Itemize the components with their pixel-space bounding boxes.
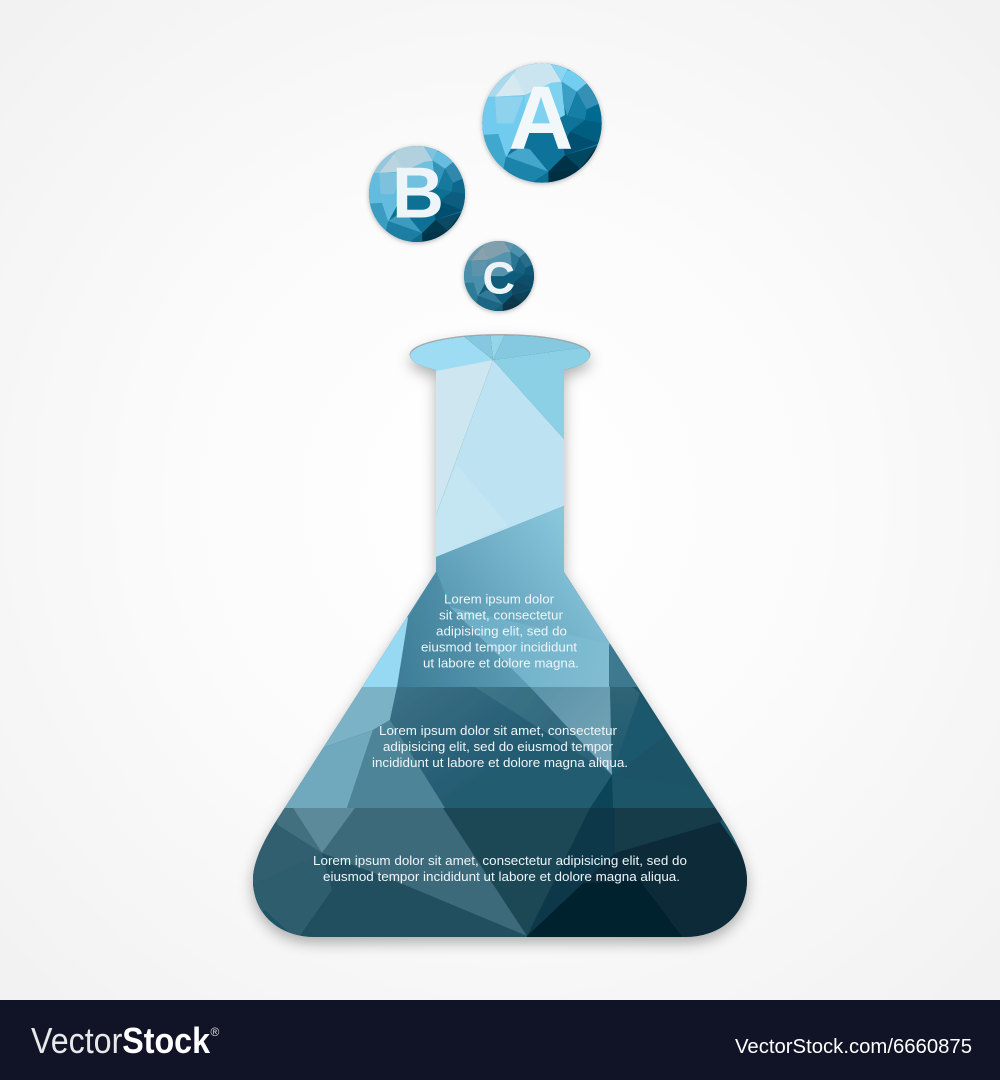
- flask: [240, 330, 760, 940]
- footer image id: VectorStock.com/6660875: [735, 1036, 972, 1058]
- text block: top: sit amet, consectetur: [439, 608, 564, 622]
- bubble A: [480, 60, 607, 187]
- text block: bottom: Lorem ipsum dolor sit amet, consectetur adipisicing elit, sed do: [313, 853, 687, 868]
- text block: bottom: eiusmod tempor incididunt ut labore et dolore magna aliqua.: [323, 869, 680, 884]
- footer logo: VectorStock: [31, 1020, 211, 1061]
- text block: top: adipisicing elit, sed do: [436, 624, 567, 638]
- bubble C: C: [482, 253, 515, 304]
- footer bar: [0, 1000, 1000, 1080]
- text block: middle: Lorem ipsum dolor sit amet, consectetur: [379, 723, 618, 738]
- bubble C: [463, 239, 537, 313]
- text block: middle: incididunt ut labore et dolore magna aliqua.: [372, 755, 628, 770]
- flask rim shadow: [410, 334, 590, 375]
- text block: top: ut labore et dolore magna.: [423, 656, 579, 670]
- bubble A: A: [508, 69, 574, 169]
- registered mark: ®: [210, 1025, 220, 1039]
- bubble B: B: [392, 154, 444, 234]
- text block: top: Lorem ipsum dolor: [444, 592, 555, 606]
- text block: middle: adipisicing elit, sed do eiusmod tempor: [383, 739, 614, 754]
- flask body: [240, 330, 760, 940]
- text block: bottom: [313, 853, 687, 884]
- text block: top: eiusmod tempor incididunt: [421, 640, 577, 654]
- text block: top: [421, 592, 579, 670]
- text block: middle: [372, 723, 628, 770]
- bubble B: [367, 143, 469, 245]
